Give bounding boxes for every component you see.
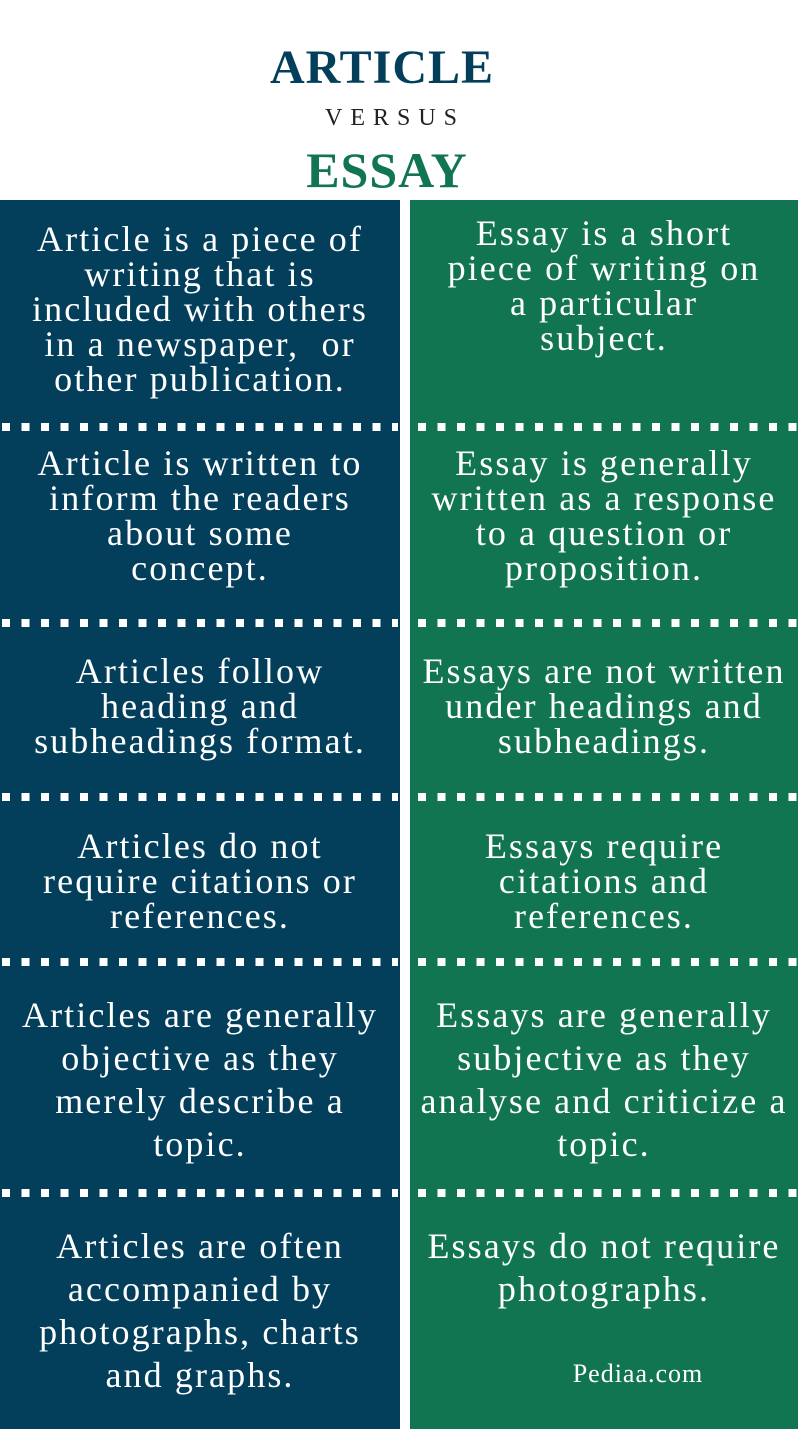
text: article row 3: Articles follow [76,651,324,691]
text: article row 5: objective as they [61,1038,339,1078]
text: article row 2: Article is written to [37,443,363,483]
text: essay row 4: Essays require [485,826,723,866]
text: article row 5: merely describe a [55,1081,345,1121]
text: essay row 6 [427,1226,781,1309]
text: article row 4: Articles do not [77,826,323,866]
text: article row 6: Articles are often [56,1226,344,1266]
text: essay row 6: Essays do not require [427,1226,781,1266]
subtitle: VERSUS: VERSUS [325,105,465,131]
text: article row 2: about some [107,513,293,553]
title: ESSAY: ESSAY [306,142,468,198]
text: article row 6: accompanied by [68,1269,332,1309]
text: essay row 1: subject. [540,318,668,358]
text: essay row 5: subjective as they [457,1038,751,1078]
text: essay row 2: written as a response [431,478,776,518]
text: essay row 5: analyse and criticize a [420,1081,788,1121]
text: article row 6: and graphs. [105,1355,295,1395]
text: article row 1: Article is a piece of [37,219,363,259]
text: essay row 5 [420,995,788,1164]
text: essay row 4: references. [514,896,694,936]
text: article row 5: topic. [153,1124,247,1164]
text: article row 6 [39,1226,361,1395]
text: article row 3: heading and [101,686,299,726]
text: article row 3 [34,651,366,761]
text: article row 5 [22,995,378,1164]
text: essay row 5: topic. [557,1124,651,1164]
text: essay row 5: Essays are generally [436,995,772,1035]
text: essay row 1 [448,213,760,358]
text: essay row 4: citations and [499,861,709,901]
text: essay row 3: subheadings. [498,721,710,761]
text: essay row 6: photographs. [498,1269,710,1309]
text: essay row 2 [431,443,776,588]
text: essay row 1: piece of writing on [448,248,760,288]
logo: Pediaa.com: Pediaa.com [573,1359,703,1388]
text: essay row 3: under headings and [445,686,763,726]
title: ARTICLE: ARTICLE [270,41,494,94]
text: article row 1: included with others [32,289,368,329]
text: article row 2 [37,443,363,588]
text: article row 3: subheadings format. [34,721,366,761]
text: article row 2: concept. [131,548,269,588]
text: article row 4: references. [110,896,290,936]
text: essay row 1: a particular [510,283,698,323]
text: essay row 2: Essay is generally [455,443,753,483]
text: essay row 2: proposition. [505,548,703,588]
text: article row 2: inform the readers [49,478,351,518]
text: article row 1: in a newspaper, or [44,324,356,364]
text: article row 4: require citations or [43,861,357,901]
text: essay row 3: Essays are not written [422,651,786,691]
text: essay row 1: Essay is a short [476,213,732,253]
panel: essay column [410,200,798,1429]
text: essay row 3 [422,651,786,761]
text: article row 1: writing that is [84,254,316,294]
text: article row 4 [43,826,357,936]
panel: article column [0,200,400,1429]
text: article row 1 [32,219,368,399]
text: essay row 4 [485,826,723,936]
text: article row 5: Articles are generally [22,995,378,1035]
text: article row 6: photographs, charts [39,1312,361,1352]
text: article row 1: other publication. [54,359,346,399]
text: essay row 2: to a question or [476,513,732,553]
